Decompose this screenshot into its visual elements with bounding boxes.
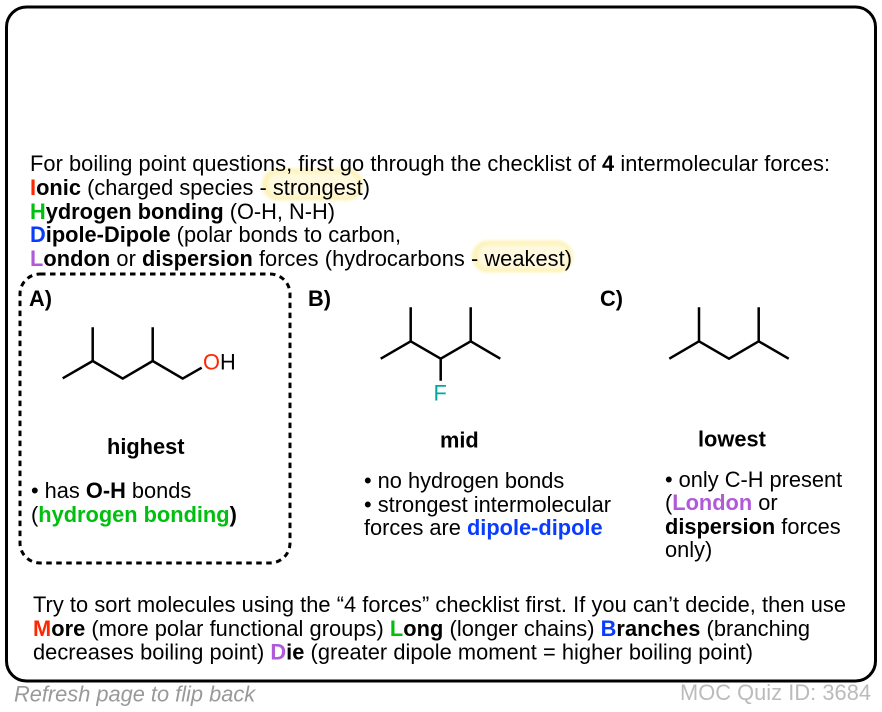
explanation B: • strongest intermolecular	[364, 492, 611, 517]
explanation C: • only C-H present	[665, 467, 842, 492]
explanation C: dispersion forces	[665, 514, 841, 539]
molecule C	[669, 307, 789, 359]
fluorine label: F	[434, 381, 447, 406]
rank: lowest: lowest	[698, 426, 766, 452]
explanation B	[364, 468, 611, 540]
highlight: strongest	[262, 168, 363, 200]
label C: C)	[600, 286, 623, 311]
dipole-dipole line: Dipole-Dipole (polar bonds to carbon,	[30, 222, 401, 247]
explanation C	[665, 467, 842, 562]
hydrogen bonding line: Hydrogen bonding (O-H, N-H)	[30, 199, 335, 224]
rank: highest: highest	[107, 434, 185, 459]
label A: A)	[29, 286, 52, 311]
footer: refresh note: Refresh page to flip back	[14, 682, 256, 706]
checklist text block	[30, 151, 830, 271]
summary text block	[33, 592, 846, 664]
summary line 2: More (more polar functional groups) Long (longer chains) Branches (branching	[33, 616, 810, 641]
option B	[308, 286, 611, 540]
panel A: dashed answer box	[20, 274, 290, 563]
explanation C: only)	[665, 537, 712, 562]
highlight: weakest	[472, 240, 573, 272]
explanation C: (London or	[665, 490, 778, 515]
explanation B: forces are dipole-dipole	[364, 515, 603, 540]
explanation A: (hydrogen bonding)	[31, 502, 237, 527]
option C	[600, 286, 842, 562]
label B: B)	[308, 286, 331, 311]
explanation B: • no hydrogen bonds	[364, 468, 564, 493]
london line: London or dispersion forces (hydrocarbons - weakest)	[30, 246, 572, 271]
summary line 3: decreases boiling point) Die (greater dipole moment = higher boiling point)	[33, 640, 753, 664]
option A	[29, 286, 237, 527]
explanation A	[31, 478, 237, 527]
rank: mid: mid	[440, 428, 479, 452]
explanation A: • has O-H bonds	[31, 478, 191, 503]
molecule B	[381, 307, 500, 406]
hydroxyl group label: OH	[203, 350, 236, 374]
checklist intro: For boiling point questions, first go through the checklist of 4 intermolecular forces:	[30, 151, 830, 176]
summary line 1: Try to sort molecules using the “4 forces” checklist first. If you can’t decide, then use	[33, 592, 846, 617]
ionic line: Ionic (charged species - strongest)	[30, 175, 370, 200]
molecule A	[63, 327, 236, 379]
footer: quiz id: MOC Quiz ID: 3684	[680, 680, 871, 705]
